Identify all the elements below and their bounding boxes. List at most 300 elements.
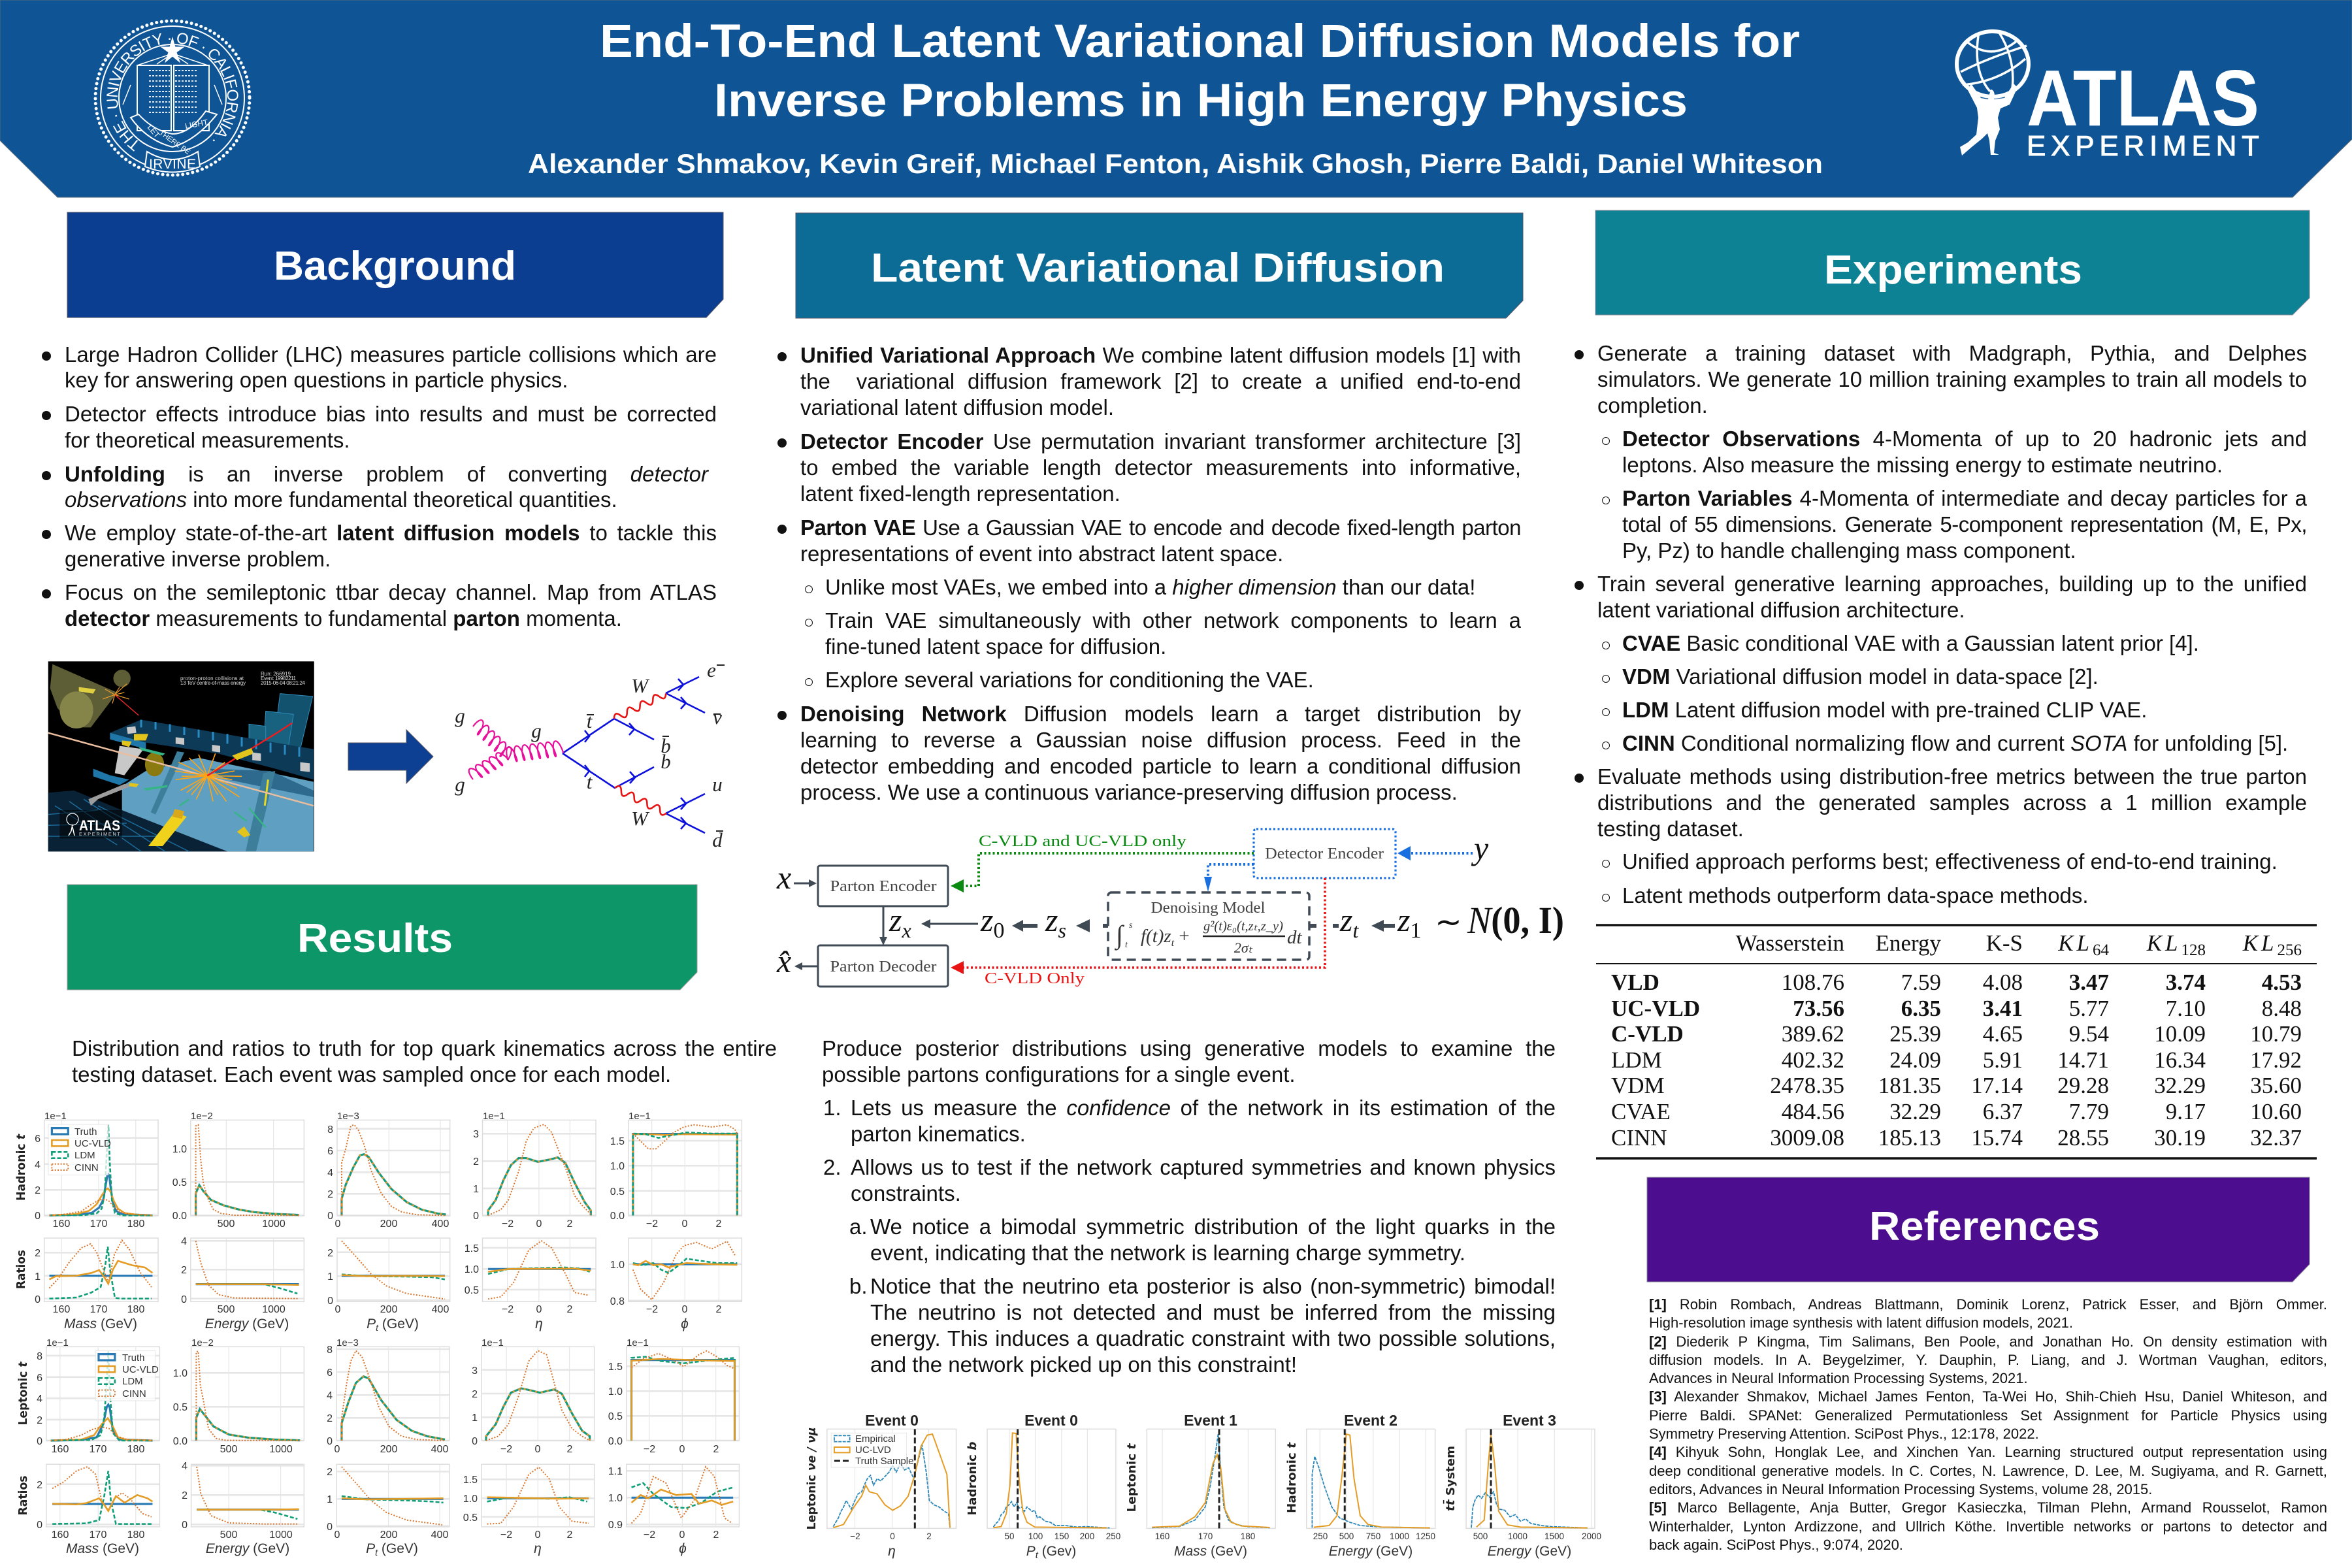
text block: references list: [1] Robin Rombach, Andreas Blattmann, Dominik Lorenz, Patrick Esser, and Björn Ommer. — [1649, 1296, 2327, 1313]
chart group: Leptonic t distributions and ratios — [16, 1337, 740, 1558]
chart: Leptonic t phi — [608, 1337, 740, 1455]
table row: LDM — [1611, 1047, 2302, 1073]
box: Denoising Model: Denoising Model — [1151, 900, 1266, 917]
table row: C-VLD: C-VLD — [1611, 1021, 1684, 1047]
chart: Leptonic t Pt: 6 — [327, 1367, 333, 1379]
chart: Hadronic t mass ratio — [35, 1238, 158, 1331]
chart: Hadronic t eta: 1 — [473, 1184, 479, 1195]
text block: Experiments bullets: total of 55 dimensions. Generate 5-component representation (M, E, Px, — [1622, 512, 2307, 536]
chart: Leptonic t phi ratio: 1.0 — [608, 1493, 623, 1504]
arrow: red C-VLD path: C-VLD Only — [985, 970, 1085, 987]
chart: Hadronic t phi: 0 — [682, 1218, 688, 1230]
panel: Background heading — [67, 212, 723, 318]
chart: Hadronic t eta: 3 — [473, 1129, 479, 1140]
panel: Experiments heading: Experiments — [1824, 248, 2082, 293]
chart: Hadronic t phi: 2 — [716, 1218, 722, 1230]
text block: references list: High-resolution image synthesis with latent diffusion models, 2021. — [1649, 1315, 2073, 1331]
chart: Hadronic t phi ratio: 1.0 — [610, 1260, 625, 1271]
chart: Leptonic t Pt ratio — [327, 1464, 449, 1558]
title: End-To-End Latent Variational Diffusion Models for — [600, 16, 1800, 67]
icon: university seal: IRVINE — [149, 157, 196, 172]
chart: Leptonic t mass ratio: 0 — [37, 1520, 42, 1531]
text block: posterior description and numbered list: constraints. — [851, 1181, 961, 1205]
icon: university seal: THE · UNIVERSITY · OF · CALIFORNIA · — [106, 33, 238, 152]
chart: Leptonic t mass ratio — [37, 1464, 159, 1556]
chart: Leptonic t phi ratio — [608, 1464, 740, 1556]
chart: Event 0 Leptonic neutrino eta: 2 — [926, 1531, 932, 1541]
axis label: Ratios: Ratios — [14, 1250, 28, 1289]
chart: Leptonic t Pt ratio: t — [375, 1547, 378, 1558]
chart: Hadronic t mass ratio: 170 — [90, 1304, 107, 1315]
arrow: blue detector to denoising — [1204, 864, 1254, 892]
table header: 64 — [2093, 941, 2109, 959]
icon: university seal: LET — [146, 123, 162, 140]
box: Denoising Model: 2σₜ — [1234, 939, 1253, 956]
chart: Leptonic t mass: 180 — [127, 1444, 144, 1455]
text block: Background bullets: We employ state-of-the-art latent diffusion models to tackle this — [65, 521, 717, 545]
text block: Experiments bullets: latent variational diffusion architecture. — [1597, 598, 1965, 622]
header banner — [0, 0, 2352, 197]
chart: Hadronic t Pt: 0 — [327, 1211, 333, 1222]
math labels: 0 — [993, 919, 1004, 943]
table row: CINN: 32.37 — [2250, 1125, 2302, 1151]
chart: Hadronic t Pt ratio — [327, 1238, 450, 1333]
text block: Experiments bullets: completion. — [1597, 393, 1708, 417]
box: Detector Encoder: Detector Encoder — [1265, 845, 1384, 862]
table row: VLD: 3.47 — [2069, 970, 2109, 995]
chart: Hadronic t mass: Truth — [74, 1126, 97, 1137]
chart: Hadronic t Pt: 8 — [327, 1124, 333, 1135]
box: Denoising Model: g²(t)ε₀(t,zₜ,z_y) — [1203, 918, 1283, 934]
chart: Feynman diagram: u — [712, 773, 723, 796]
image: ATLAS event display: 13 TeV centre-of-mass energy — [180, 680, 246, 686]
text block: Results description: Distribution and ratios to truth for top quark kinematics across the entire — [72, 1036, 777, 1060]
text block: posterior description and numbered list: b. — [849, 1274, 868, 1298]
table row: LDM: LDM — [1611, 1047, 1662, 1073]
table row: C-VLD: 389.62 — [1782, 1021, 1844, 1047]
table row: CINN: 185.13 — [1878, 1125, 1941, 1151]
chart: Leptonic t eta: 0 — [535, 1444, 541, 1455]
panel: Results heading — [67, 885, 697, 990]
text block: Experiments bullets: simulators. We generate 10 million training examples to train all models to — [1597, 367, 2307, 391]
text block: Experiments bullets: Latent methods outperform data-space methods. — [1622, 883, 2089, 907]
chart: Event 2 Hadronic t energy — [1285, 1412, 1435, 1559]
chart: Hadronic t energy ratio: 500 — [218, 1304, 235, 1315]
table row: LDM: 5.91 — [1983, 1047, 2023, 1073]
table row: CVAE: 7.79 — [2069, 1099, 2109, 1124]
chart group: Hadronic t distributions and ratios — [14, 1111, 742, 1333]
chart: Leptonic t eta ratio: 2 — [567, 1529, 573, 1541]
chart: Leptonic t mass: CINN — [122, 1388, 146, 1399]
chart: Event 0 Leptonic neutrino eta: Leptonic νe / νμ — [805, 1427, 819, 1530]
panel: References heading — [1647, 1177, 2310, 1282]
chart: Hadronic t phi ratio: 2 — [716, 1304, 722, 1315]
text block: Background bullets: Unfolding is an inverse problem of converting detector — [65, 462, 708, 486]
chart: Event 2 Hadronic t energy: 750 — [1366, 1531, 1380, 1541]
table row: VLD: 4.53 — [2262, 970, 2302, 995]
math labels — [776, 859, 1564, 979]
table row: LDM: 17.92 — [2250, 1047, 2302, 1073]
chart: Hadronic t energy ratio: 0 — [181, 1294, 187, 1305]
chart: Event 0 Leptonic neutrino eta: Event 0 — [865, 1412, 919, 1429]
chart: Event 1 Leptonic t mass: Event 1 — [1184, 1412, 1237, 1429]
text block: references list: [2] Diederik P Kingma, Tim Salimans, Ben Poole, and Jonathan Ho. On density estimation with — [1649, 1333, 2327, 1350]
chart: Event 0 Leptonic neutrino eta: Truth Sample — [855, 1456, 913, 1467]
table row: VDM: 181.35 — [1878, 1073, 1941, 1098]
chart: Leptonic t mass: UC-VLD — [122, 1364, 159, 1375]
chart: Hadronic t phi: 0.0 — [610, 1211, 625, 1222]
chart: Hadronic t energy: 1e−2 — [191, 1111, 213, 1122]
image: ATLAS event display: Event: 19982211 — [261, 676, 297, 681]
chart: Leptonic t Pt ratio: 0 — [327, 1522, 333, 1533]
chart: Hadronic t Pt: 2 — [327, 1189, 333, 1200]
table row: CVAE: CVAE — [1611, 1099, 1671, 1124]
chart: Leptonic t phi ratio: ϕ — [679, 1541, 687, 1556]
text block: posterior description and numbered list — [822, 1036, 1556, 1377]
table row: LDM: 16.34 — [2154, 1047, 2206, 1073]
chart: Leptonic t energy ratio: 0 — [182, 1520, 188, 1531]
math labels: s — [1058, 919, 1066, 942]
chart: Hadronic t eta: 1e−1 — [483, 1111, 505, 1122]
chart: Leptonic t eta ratio: −2 — [500, 1529, 512, 1541]
text block: Latent Variational Diffusion bullets: fine-tuned latent space for diffusion. — [825, 634, 1166, 659]
chart: Event 0 Hadronic b Pt — [966, 1412, 1120, 1561]
text block: Experiments bullets: Evaluate methods using distribution-free metrics between the true parton — [1597, 764, 2307, 789]
table row: UC-VLD: 73.56 — [1793, 996, 1844, 1021]
text block: Experiments bullets: Py, Pz) to handle challenging mass component. — [1622, 538, 2076, 563]
chart: Leptonic t energy: 1e−2 — [191, 1337, 214, 1348]
text block: posterior description and numbered list: We notice a bimodal symmetric distribution of the light quarks in the — [870, 1215, 1556, 1239]
box: Parton Decoder — [818, 945, 948, 987]
image: ATLAS event display — [48, 661, 314, 851]
arrow: detector to parton — [348, 730, 433, 783]
text block: Experiments bullets: Unified approach performs best; effectiveness of end-to-end training. — [1622, 849, 2278, 874]
text block: Results description: testing dataset. Each event was sampled once for each model. — [72, 1062, 671, 1086]
chart: Leptonic t mass: Truth — [122, 1352, 144, 1364]
text block: Experiments bullets: Detector Observations 4-Momenta of up to 20 hadronic jets and — [1622, 427, 2307, 451]
icon: ATLAS logo: ATLAS — [2027, 54, 2259, 142]
chart: Leptonic t eta: 1e−1 — [482, 1337, 504, 1348]
box: Detector Encoder — [1254, 829, 1396, 878]
table row: CVAE — [1611, 1099, 2302, 1124]
chart: Event 0 Leptonic neutrino eta: 0 — [890, 1531, 895, 1541]
chart: Event 0 Hadronic b Pt: Hadronic b — [966, 1441, 979, 1516]
chart: Event 0 Leptonic neutrino eta: η — [888, 1544, 896, 1559]
chart: Feynman diagram: W — [631, 807, 650, 830]
chart: Hadronic t mass ratio: 160 — [53, 1304, 70, 1315]
chart: Hadronic t mass: 1e−1 — [44, 1111, 67, 1122]
chart: Hadronic t energy: 500 — [218, 1218, 235, 1230]
chart: Event 0 Hadronic b Pt: 50 — [1004, 1531, 1015, 1541]
text block: Latent Variational Diffusion bullets: the variational diffusion framework [2] to create a unified end-to-end — [800, 369, 1521, 393]
chart: Feynman diagram: b — [661, 750, 671, 773]
chart: Leptonic t eta — [472, 1337, 595, 1455]
chart: Leptonic t mass: 2 — [37, 1415, 42, 1426]
table row: CVAE: 9.17 — [2166, 1099, 2206, 1124]
arrow: blue y to detector: y — [1471, 830, 1489, 866]
table row: VLD: 3.74 — [2166, 970, 2206, 995]
text block: references list: editors, Advances in Neural Information Processing Systems, volume 28, 2015. — [1649, 1481, 2152, 1497]
chart: Hadronic t mass: 170 — [90, 1218, 107, 1230]
table row: VLD: 108.76 — [1782, 970, 1844, 995]
chart: Leptonic t mass: 6 — [37, 1373, 42, 1384]
text block: posterior description and numbered list: and the network picked up on this constraint! — [870, 1352, 1297, 1377]
table row: UC-VLD: UC-VLD — [1611, 996, 1700, 1021]
chart: Event 3 tt system energy — [1443, 1412, 1601, 1559]
table row: CVAE: 10.60 — [2250, 1099, 2302, 1124]
chart: Leptonic t energy — [173, 1337, 304, 1455]
chart: Leptonic t eta ratio: 0 — [535, 1529, 541, 1541]
text block: Latent Variational Diffusion bullets: Unified Variational Approach We combine latent diffusion models [1] with — [800, 343, 1521, 367]
chart: Leptonic t mass: 0 — [37, 1436, 42, 1447]
box: Parton Encoder: Parton Encoder — [830, 878, 937, 895]
chart: Leptonic t energy ratio — [182, 1461, 304, 1556]
chart: Hadronic t phi: 1.0 — [610, 1161, 625, 1172]
text block: posterior description and numbered list: event, indicating that the network is learning charge symmetry. — [870, 1241, 1465, 1265]
text block: references list: Advances in Neural Information Processing Systems, 2021. — [1649, 1370, 2028, 1386]
chart: Leptonic t Pt — [327, 1337, 449, 1455]
chart: Feynman diagram: t — [587, 770, 593, 793]
table row: VDM: 2478.35 — [1770, 1073, 1844, 1098]
chart: Event 0 Hadronic b Pt: 150 — [1054, 1531, 1069, 1541]
chart: Event 0 Hadronic b Pt: Event 0 — [1024, 1412, 1078, 1429]
text block: Experiments bullets: CINN Conditional normalizing flow and current SOTA for unfolding [5]. — [1622, 731, 2288, 755]
chart: Leptonic t phi: 0.5 — [608, 1411, 623, 1422]
arrow: blue y to detector — [1397, 830, 1489, 866]
table row: CINN: 30.19 — [2154, 1125, 2206, 1151]
text block: references list: Symmetry Preserving Attention. SciPost Phys., 12:178, 2022. — [1649, 1426, 2039, 1442]
math labels: z — [1397, 902, 1410, 938]
chart: Leptonic t Pt ratio: 1 — [327, 1494, 333, 1505]
panel: Experiments heading — [1595, 210, 2310, 315]
chart: Leptonic t phi: 0.0 — [608, 1436, 623, 1447]
chart: Leptonic t eta ratio: 0.5 — [463, 1512, 478, 1524]
table row: C-VLD: 10.79 — [2250, 1021, 2302, 1047]
chart: Hadronic t Pt: 1e−3 — [337, 1111, 359, 1122]
chart: Event 0 Hadronic b Pt: (Gev) — [1038, 1544, 1076, 1559]
text block: Experiments bullets: leptons. Also measure the missing energy to estimate neutrino. — [1622, 453, 2223, 477]
chart: Leptonic t phi: 1.0 — [608, 1386, 623, 1397]
chart: Leptonic t eta ratio: 1.0 — [463, 1494, 478, 1505]
chart: Leptonic t Pt: 0 — [327, 1436, 333, 1447]
authors: Alexander Shmakov, Kevin Greif, Michael Fenton, Aishik Ghosh, Pierre Baldi, Daniel Whiteson — [528, 148, 1823, 179]
chart: Feynman diagram: e — [707, 659, 716, 681]
table row: C-VLD: 10.09 — [2154, 1021, 2206, 1047]
table row: LDM: 402.32 — [1782, 1047, 1844, 1073]
text block: Background bullets: key for answering open questions in particle physics. — [65, 368, 568, 392]
text block: posterior description and numbered list: 1. — [823, 1096, 841, 1120]
chart: Hadronic t Pt: 4 — [327, 1168, 333, 1179]
table row: UC-VLD: 8.48 — [2262, 996, 2302, 1021]
chart: Hadronic t eta: 0 — [473, 1211, 479, 1222]
chart: Feynman diagram: v — [713, 706, 722, 728]
chart: Leptonic t Pt: 1e−3 — [336, 1337, 359, 1348]
chart: Hadronic t eta ratio: 1.0 — [465, 1264, 479, 1275]
chart: Hadronic t Pt ratio: t — [376, 1322, 379, 1333]
table row: C-VLD — [1611, 1021, 2302, 1047]
chart: Leptonic t phi: 1.5 — [608, 1362, 623, 1373]
chart: Leptonic t mass: 1e−1 — [46, 1337, 69, 1348]
chart: Hadronic t Pt: 400 — [432, 1218, 449, 1230]
chart: Event 0 Leptonic neutrino eta: Empirical — [855, 1433, 896, 1445]
math labels: x — [901, 919, 911, 942]
chart: Leptonic t eta: 0 — [472, 1436, 478, 1447]
chart: Event 1 Leptonic t mass: 170 — [1198, 1531, 1213, 1541]
chart: Hadronic t phi ratio: −2 — [646, 1304, 658, 1315]
chart: Hadronic t energy ratio: Energy (GeV) — [205, 1316, 289, 1331]
text block: Background bullets: for theoretical measurements. — [65, 428, 350, 452]
chart: Hadronic t phi ratio: 0 — [682, 1304, 688, 1315]
chart: Event 2 Hadronic t energy: 250 — [1313, 1531, 1328, 1541]
table row: VLD: 7.59 — [1901, 970, 1941, 995]
chart: Leptonic t Pt: 4 — [327, 1390, 333, 1401]
box: Denoising Model — [1108, 892, 1309, 960]
chart: Hadronic t Pt ratio: 400 — [432, 1304, 449, 1315]
chart: Hadronic t energy: 0.0 — [172, 1211, 187, 1222]
chart: Event 0 Hadronic b Pt: 250 — [1106, 1531, 1120, 1541]
chart: Hadronic t eta: 0 — [536, 1218, 542, 1230]
chart: Hadronic t eta: 2 — [473, 1156, 479, 1168]
chart: Hadronic t energy: 0.5 — [172, 1177, 187, 1188]
chart: Hadronic t mass: LDM — [74, 1150, 95, 1161]
chart: Leptonic t eta ratio: 1.5 — [463, 1475, 478, 1486]
table row: VLD — [1611, 970, 2302, 995]
chart: Leptonic t phi ratio: 1.1 — [608, 1466, 623, 1477]
chart: Event 2 Hadronic t energy: Event 2 — [1344, 1412, 1397, 1429]
chart: Hadronic t mass ratio: 180 — [127, 1304, 144, 1315]
chart: Hadronic t Pt: 200 — [380, 1218, 397, 1230]
chart: Leptonic t eta ratio: η — [534, 1541, 542, 1556]
table row: CINN: 3009.08 — [1770, 1125, 1844, 1151]
chart: Hadronic t eta: −2 — [502, 1218, 514, 1230]
chart: Hadronic t phi ratio: ϕ — [681, 1316, 689, 1331]
chart: Hadronic t mass: 4 — [35, 1160, 41, 1171]
table row: CVAE: 32.29 — [1889, 1099, 1941, 1124]
table row: C-VLD: 25.39 — [1889, 1021, 1941, 1047]
chart: Event 0 Hadronic b Pt: 200 — [1080, 1531, 1094, 1541]
chart: Hadronic t energy — [172, 1111, 304, 1230]
chart: Event 0 Hadronic b Pt: 100 — [1028, 1531, 1043, 1541]
chart: Event 3 tt system energy: 500 — [1473, 1531, 1488, 1541]
text block: posterior description and numbered list: parton kinematics. — [851, 1122, 1026, 1146]
text block: Latent Variational Diffusion bullets: to embed the variable length detector measurements into informative, — [800, 455, 1521, 480]
axis label: Hadronic t: Hadronic t — [14, 1134, 28, 1201]
text block: references list: [5] Marco Bellagente, Anja Butter, Gregor Kasieczka, Tilman Plehn, Armand Rousselot, Ramon — [1649, 1499, 2327, 1516]
math labels: z — [889, 902, 902, 938]
chart: Leptonic t eta: 2 — [472, 1389, 478, 1400]
table header: Wasserstein — [1736, 930, 1844, 956]
chart: Leptonic t mass: 8 — [37, 1351, 42, 1362]
box: Denoising Model: s — [1129, 921, 1133, 930]
chart: Leptonic t energy ratio: Energy (GeV) — [206, 1541, 289, 1556]
text block: Experiments bullets: VDM Variational diffusion model in data-space [2]. — [1622, 664, 2099, 689]
text block: Experiments bullets: distributions and the generated samples across a 1 million example — [1597, 791, 2307, 815]
chart: Hadronic t phi — [610, 1111, 742, 1230]
chart: Leptonic t mass ratio: 2 — [37, 1480, 42, 1491]
chart: Hadronic t mass ratio: 2 — [35, 1248, 41, 1259]
text block: posterior description and numbered list: a. — [849, 1215, 868, 1239]
chart: Hadronic t Pt: 6 — [327, 1146, 333, 1157]
chart: Hadronic t Pt ratio: 0 — [327, 1296, 333, 1307]
text block: Experiments bullets: LDM Latent diffusion model with pre-trained CLIP VAE. — [1622, 698, 2147, 722]
math labels: z — [1340, 902, 1352, 938]
text block: Background bullets: Detector effects introduce bias into results and must be corrected — [65, 402, 717, 426]
chart: Leptonic t mass: 4 — [37, 1394, 42, 1405]
chart: Hadronic t phi: −2 — [646, 1218, 658, 1230]
chart: Hadronic t energy: 1.0 — [172, 1144, 187, 1155]
chart: Hadronic t mass — [35, 1111, 158, 1230]
text block: references list — [1649, 1296, 2327, 1553]
chart: Event 3 tt system energy: tt̄ System — [1443, 1446, 1458, 1511]
text block: Latent Variational Diffusion bullets: process. We use a continuous variance-preserving diffusion process. — [800, 780, 1458, 804]
text block: Background bullets: detector measurements to fundamental parton momenta. — [65, 606, 622, 630]
table row: VDM: 32.29 — [2154, 1073, 2206, 1098]
text block: Experiments bullets — [1575, 341, 2307, 907]
text block: Latent Variational Diffusion bullets: Train VAE simultaneously with other network components to learn a — [825, 608, 1521, 632]
table row: LDM: 14.71 — [2057, 1047, 2109, 1073]
chart: Hadronic t mass: CINN — [74, 1162, 99, 1173]
chart: Hadronic t Pt ratio: 1 — [327, 1271, 333, 1282]
text block: references list: diffusion models. In A. Beygelzimer, Y. Dauphin, P. Liang, and J. Wortman Vaughan, editors, — [1649, 1352, 2327, 1368]
text block: Latent Variational Diffusion bullets: latent fixed-length representation. — [800, 482, 1120, 506]
panel: Background heading: Background — [274, 244, 516, 289]
chart: Hadronic t energy ratio — [181, 1236, 304, 1331]
chart: Leptonic t energy: 0.5 — [173, 1402, 188, 1413]
text block: posterior description and numbered list: Allows us to test if the network captured symmetries and known physics — [851, 1155, 1556, 1179]
text block: Experiments bullets: CVAE Basic conditional VAE with a Gaussian latent prior [4]. — [1622, 631, 2199, 655]
table row: VDM: 35.60 — [2250, 1073, 2302, 1098]
math labels: z — [981, 902, 993, 938]
text block: Experiments bullets: testing dataset. — [1597, 817, 1744, 841]
table row: LDM: 24.09 — [1889, 1047, 1941, 1073]
table header: 128 — [2181, 941, 2206, 959]
chart: Leptonic t eta: 3 — [472, 1365, 478, 1377]
text block: posterior description and numbered list: Produce posterior distributions using generative models to examine the — [822, 1036, 1556, 1060]
chart: Leptonic t energy: 0.0 — [173, 1436, 188, 1447]
chart: Hadronic t Pt ratio: (GeV) — [378, 1316, 419, 1331]
chart: Hadronic t eta — [473, 1111, 596, 1230]
chart: Leptonic t energy: 1.0 — [173, 1368, 188, 1379]
table row: VDM: VDM — [1611, 1073, 1665, 1098]
table header — [1736, 930, 2302, 959]
arrow: red C-VLD path — [951, 878, 1325, 987]
table row: CINN: 15.74 — [1971, 1125, 2023, 1151]
table header: KL — [2146, 930, 2181, 956]
table header: KL — [2242, 930, 2278, 956]
chart: Event 0 Hadronic b Pt: P — [1026, 1544, 1036, 1559]
image: ATLAS event display: 2015-06-04 08:21:24 — [261, 680, 306, 686]
icon: university seal — [94, 20, 251, 176]
chart: Leptonic t eta: 2 — [567, 1444, 573, 1455]
image: ATLAS event display: Run: 266919 — [261, 671, 291, 677]
chart: Hadronic t mass: 180 — [127, 1218, 144, 1230]
text block: Latent Variational Diffusion bullets: variational latent diffusion model. — [800, 395, 1114, 419]
chart: Hadronic t energy ratio: 4 — [181, 1236, 187, 1247]
chart: Feynman diagram: g — [455, 773, 465, 796]
chart: Hadronic t phi: 1e−1 — [629, 1111, 651, 1122]
table row: C-VLD: 4.65 — [1983, 1021, 2023, 1047]
chart: Leptonic t Pt: 8 — [327, 1345, 333, 1356]
text block: Experiments bullets: Train several generative learning approaches, building up to the unified — [1597, 572, 2307, 596]
chart: Leptonic t mass ratio: 180 — [127, 1529, 144, 1541]
chart: Event 0 Leptonic neutrino eta: UC-LVD — [855, 1445, 891, 1456]
chart: Leptonic t eta ratio — [463, 1464, 595, 1556]
panel: References heading: References — [1869, 1204, 2100, 1249]
chart: Leptonic t energy ratio: 2 — [182, 1490, 188, 1501]
chart: Leptonic t phi ratio: −2 — [644, 1529, 655, 1541]
chart: Leptonic t Pt ratio: 0 — [335, 1529, 340, 1541]
box: Parton Decoder: Parton Decoder — [830, 958, 937, 975]
